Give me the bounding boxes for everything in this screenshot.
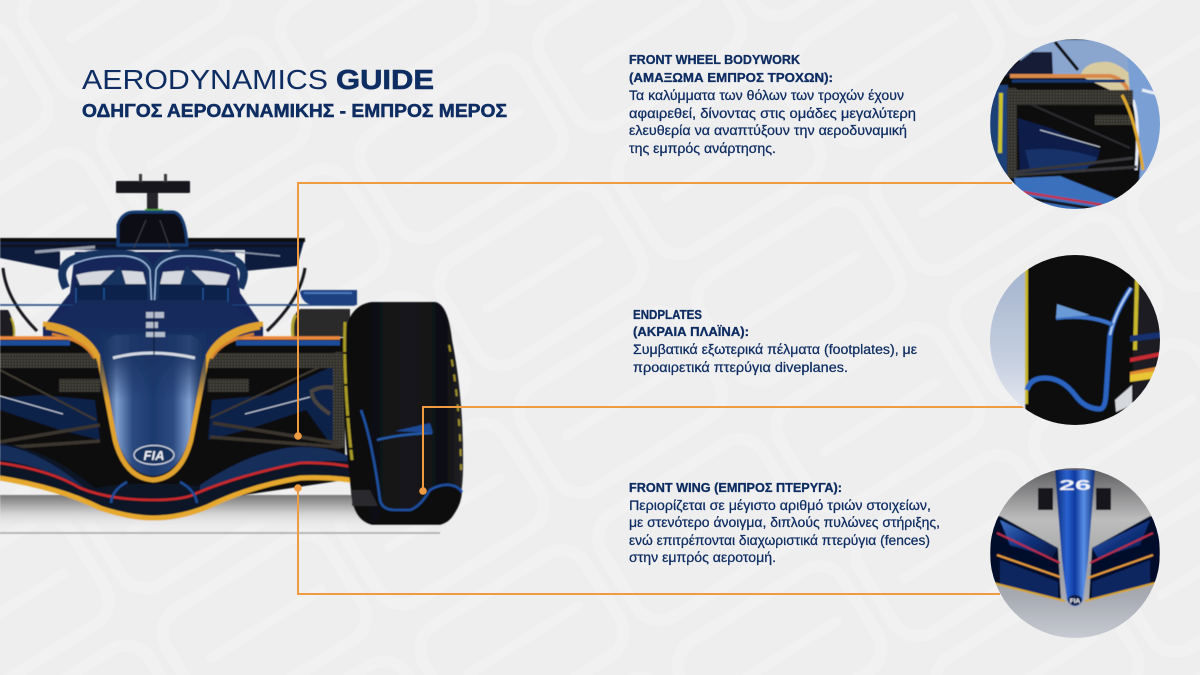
F1 car front view xyxy=(0,174,463,533)
title: GUIDE xyxy=(336,64,434,95)
text block: front wheel bodywork: (ΑΜΑΞΩΜΑ ΕΜΠΡΟΣ ΤΡΟΧΩΝ): xyxy=(629,70,833,85)
text block: endplates: ENDPLATES xyxy=(633,307,702,322)
thin cross line xyxy=(0,304,355,306)
sidepod shoulder and orange stripes xyxy=(0,340,340,346)
detail circle: front wing xyxy=(989,468,1161,640)
callout line: endplates xyxy=(419,407,1025,495)
title xyxy=(82,64,434,95)
text block: front wing xyxy=(629,480,940,565)
text block: front wing: στην εμπρός αεροτομή. xyxy=(629,550,776,565)
text block: endplates: Συμβατικά εξωτερικά πέλματα (footplates), με xyxy=(633,342,917,357)
halo windows xyxy=(76,271,146,285)
nose outer stripes xyxy=(43,324,263,480)
text block: front wing: με στενότερο άνοιγμα, διπλούς πυλώνες στήριξης, xyxy=(629,515,940,530)
callout line: front wing xyxy=(294,484,1000,594)
text block: endplates: (ΑΚΡΑΙΑ ΠΛΑΪΝΑ): xyxy=(633,324,749,339)
subtitle: ΟΔΗΓΟΣ ΑΕΡΟΔΥΝΑΜΙΚΗΣ - ΕΜΠΡΟΣ ΜΕΡΟΣ xyxy=(82,101,507,121)
upper nose body xyxy=(50,300,256,476)
carbon wishbones xyxy=(0,352,345,448)
FIA badge: FIA xyxy=(144,448,164,463)
car number marks xyxy=(146,312,165,337)
detail circle: endplates xyxy=(989,254,1161,426)
FIA badge xyxy=(134,446,174,464)
text block: front wheel bodywork: FRONT WHEEL BODYWORK xyxy=(629,52,801,67)
text block: front wheel bodywork: αφαιρεθεί, δίνοντας στις ομάδες μεγαλύτερη xyxy=(629,106,916,121)
nose cone xyxy=(103,335,203,476)
endplate xyxy=(352,410,462,525)
detail circle: front wheel bodywork xyxy=(990,39,1162,210)
ground shadow xyxy=(0,495,450,531)
title: AERODYNAMICS xyxy=(82,64,328,95)
engine cover and cockpit xyxy=(43,252,263,345)
halo xyxy=(62,254,244,312)
front tyre xyxy=(343,302,463,525)
text block: endplates xyxy=(633,307,917,375)
text block: front wing: Περιορίζεται σε μέγιστο αριθμό τριών στοιχείων, xyxy=(629,498,931,513)
front wing xyxy=(0,443,378,518)
text block: front wheel bodywork: της εμπρός ανάρτησης. xyxy=(629,141,776,156)
text block: front wing: FRONT WING (ΕΜΠΡΟΣ ΠΤΕΡΥΓΑ): xyxy=(629,480,842,495)
text block: front wing: ενώ επιτρέπονται διαχωριστικά πτερύγια (fences) xyxy=(629,533,930,548)
text block: front wheel bodywork: ελευθερία να αναπτύξουν την αεροδυναμική xyxy=(629,123,907,138)
airbox xyxy=(118,212,187,245)
callout line: front wheel bodywork xyxy=(294,183,1012,440)
detail circle: front wing: 26 xyxy=(1059,477,1091,494)
text block: front wheel bodywork: Τα καλύμματα των θόλων των τροχών έχουν xyxy=(629,88,904,103)
rear tyres and side blocks xyxy=(0,310,14,337)
detail circle: front wing: FIA xyxy=(1070,598,1081,605)
text block: endplates: προαιρετικά πτερύγια diveplanes. xyxy=(633,360,848,375)
text block: front wheel bodywork xyxy=(629,52,916,156)
rear wing xyxy=(0,238,305,271)
camera mount xyxy=(116,174,190,212)
dark front suspension bay xyxy=(0,338,345,500)
